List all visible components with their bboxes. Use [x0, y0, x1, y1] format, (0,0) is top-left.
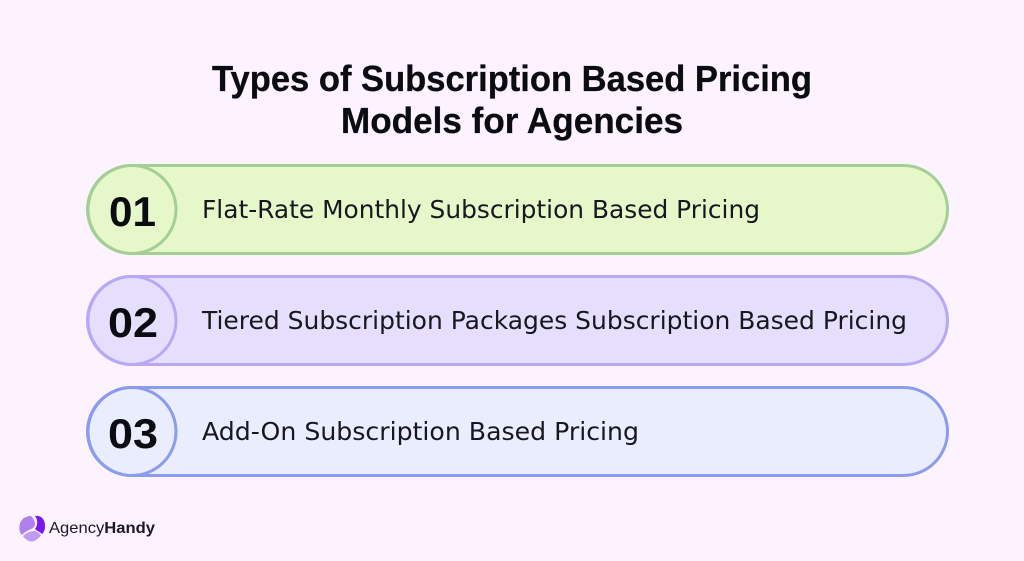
- wordmark: AgencyHandy: [49, 520, 155, 537]
- number badge 01: 01: [109, 188, 156, 235]
- panel: item 03 add-on: [88, 388, 948, 476]
- title: Models for Agencies: [341, 100, 683, 141]
- panel: item 02 tiered: [88, 276, 948, 364]
- icon: logo mark: [19, 516, 45, 542]
- title: Types of Subscription Based Pricing: [212, 58, 812, 99]
- label 03: Add-On Subscription Based Pricing: [202, 417, 639, 446]
- panel: item 01 flat-rate: [88, 166, 948, 254]
- title: [212, 58, 812, 141]
- number badge 03: 03: [108, 410, 158, 457]
- label 02: Tiered Subscription Packages Subscription Based Pricing: [201, 306, 907, 335]
- number badge 01: [88, 166, 176, 254]
- number badge 02: 02: [108, 299, 158, 346]
- label 01: Flat-Rate Monthly Subscription Based Pricing: [202, 195, 760, 224]
- number badge 02: [88, 276, 176, 364]
- logo: AgencyHandy: [19, 516, 155, 542]
- number badge 03: [88, 388, 176, 476]
